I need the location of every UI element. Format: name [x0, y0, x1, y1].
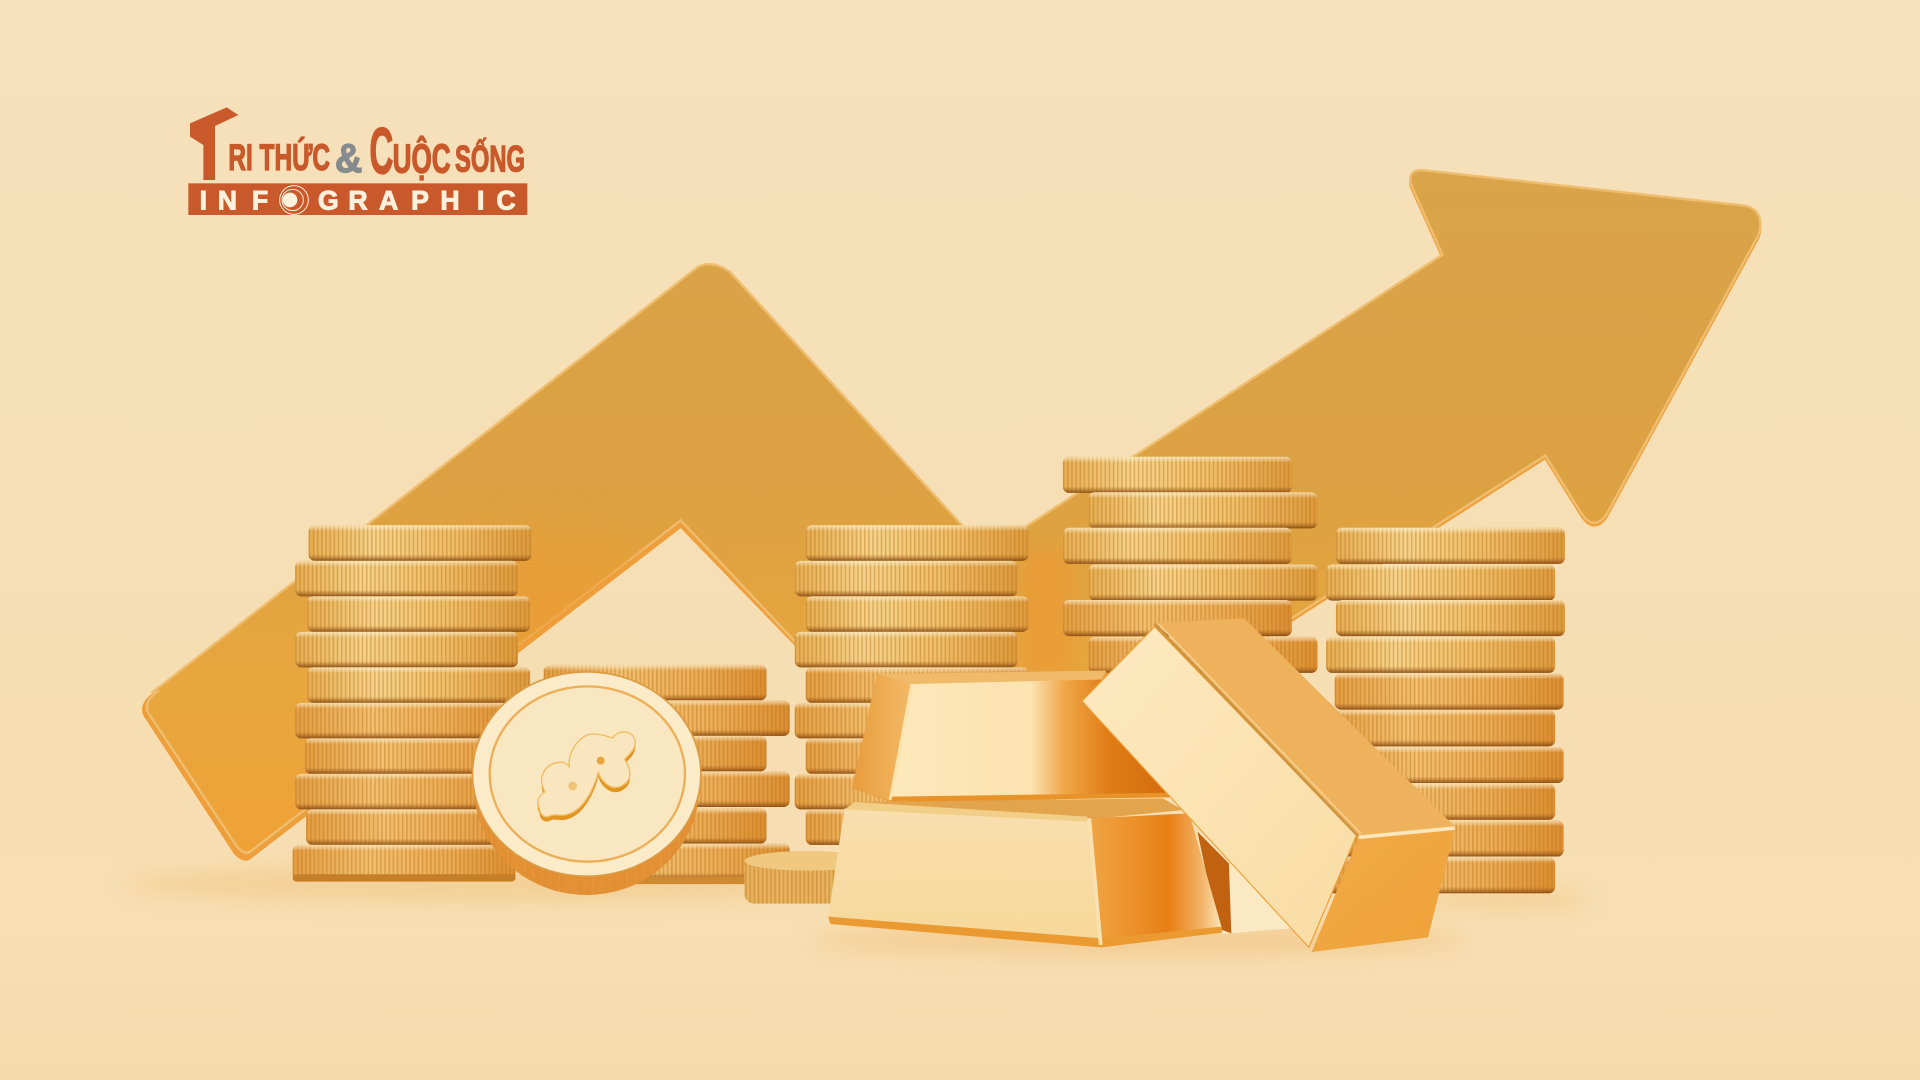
gold bar: bottom bar [828, 798, 1222, 947]
coin stack: middle [795, 525, 1029, 845]
big rising arrow [143, 170, 1760, 860]
gold bar: top left bar [852, 671, 1171, 802]
logo: Tri Thức & Cuộc Sống Infographic [188, 107, 527, 215]
logo band: INFOGRAPHIC: INF [200, 185, 268, 215]
logo name: UỘC [393, 136, 451, 182]
logo name: SỐNG [455, 138, 525, 180]
coin stack: behind dollar coin [544, 665, 790, 884]
logo name: C [369, 114, 393, 187]
coin stack: centre-right behind arrow tip [1063, 457, 1318, 673]
logo name: & [335, 135, 362, 181]
logo mark: roof T [190, 107, 238, 180]
logo band: INFOGRAPHIC: GRAPHIC [318, 185, 516, 215]
coin stack: left [293, 525, 531, 882]
gold bar: rear bar [1197, 830, 1291, 934]
small flat coin [744, 851, 872, 904]
gold bar: leaning bar [1082, 618, 1456, 952]
logo name: RI THỨC [228, 136, 330, 178]
logo band: INFOGRAPHIC [188, 183, 527, 215]
icon: dollar glyph [538, 732, 635, 822]
logo name [228, 114, 525, 187]
gold bars [828, 618, 1456, 952]
coin stack: far right [1326, 528, 1565, 893]
floor shadow [122, 867, 1592, 955]
icon: dollar coin [472, 671, 702, 895]
